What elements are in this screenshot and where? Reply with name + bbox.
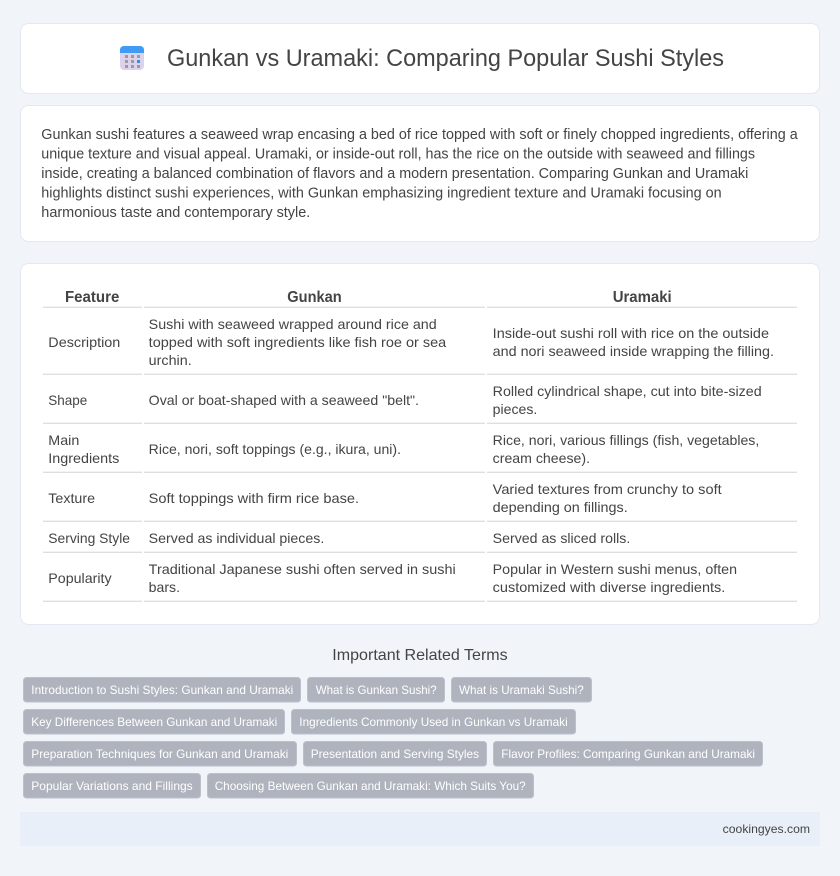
row: description: Inside-out sushi roll with rice on the outside: [493, 325, 769, 341]
row: description: Sushi with seaweed wrapped around rice and: [149, 316, 437, 332]
tag: What is Uramaki Sushi?: [459, 683, 584, 697]
footer: cookingyes.com: [723, 822, 810, 836]
tag: Presentation and Serving Styles: [311, 747, 479, 761]
row: shape: Rolled cylindrical shape, cut into bite-sized: [493, 383, 762, 399]
intro text block: [41, 127, 798, 221]
row: main ingredients: Rice, nori, various fillings (fish, vegetables,: [493, 432, 759, 448]
row: popularity: Popular in Western sushi menus, often: [493, 561, 737, 577]
tag: Ingredients Commonly Used in Gunkan vs Uramaki: [299, 715, 568, 729]
row: description: urchin.: [149, 352, 192, 368]
tag: [304, 742, 486, 766]
row: shape: pieces.: [493, 401, 537, 417]
row: main ingredients: Rice, nori, soft toppings (e.g., ikura, uni).: [149, 441, 401, 457]
table header row: Feature: [65, 289, 119, 306]
related terms tags: [24, 678, 762, 798]
row: texture: Texture: [48, 490, 95, 506]
intro text block: Gunkan sushi features a seaweed wrap encasing a bed of rice topped with soft or finely chopped ingredients, offering a: [41, 127, 798, 143]
icon: calendar: [120, 46, 144, 70]
intro text block: unique texture and visual appeal. Uramaki, or inside-out roll, has the rice on the outside with seaweed and fillings: [41, 146, 755, 162]
tag: Popular Variations and Fillings: [31, 779, 193, 793]
tag: [24, 678, 300, 702]
row: main ingredients: [48, 432, 759, 466]
row: description: and nori seaweed inside wrapping the filling.: [493, 343, 774, 359]
table header row: Gunkan: [287, 289, 342, 306]
row: popularity: Traditional Japanese sushi often served in sushi: [149, 561, 456, 577]
row: serving style: [48, 530, 630, 546]
title: Gunkan vs Uramaki: Comparing Popular Sushi Styles: [167, 45, 724, 72]
row: popularity: Popularity: [48, 570, 112, 586]
row: serving style: Served as individual pieces.: [149, 530, 324, 546]
panel: comparison table: [20, 264, 820, 624]
row: shape: Oval or boat-shaped with a seaweed "belt".: [149, 392, 419, 408]
row: shape: [48, 383, 762, 417]
tag: Choosing Between Gunkan and Uramaki: Which Suits You?: [215, 779, 526, 793]
row: popularity: bars.: [149, 579, 180, 595]
tag: [494, 742, 762, 766]
heading: important related terms: Important Related Terms: [332, 647, 508, 664]
row: popularity: customized with diverse ingredients.: [493, 579, 725, 595]
table header row: Uramaki: [613, 289, 672, 306]
row: texture: Varied textures from crunchy to soft: [493, 481, 722, 497]
row: main ingredients: cream cheese).: [493, 450, 590, 466]
row: description: topped with soft ingredients like fish roe or sea: [149, 334, 446, 350]
tag: [24, 742, 296, 766]
tag: Preparation Techniques for Gunkan and Uramaki: [31, 747, 288, 761]
header panel: [20, 24, 820, 94]
row: serving style: Serving Style: [48, 530, 130, 546]
row: main ingredients: Ingredients: [48, 450, 119, 466]
tag: [24, 710, 284, 734]
table header row: [65, 289, 672, 306]
intro text block: highlights distinct sushi experiences, with Gunkan emphasizing ingredient texture and Uramaki focusing on: [41, 186, 722, 202]
tag: Introduction to Sushi Styles: Gunkan and Uramaki: [31, 683, 293, 697]
tag: [452, 678, 592, 702]
footer: [20, 812, 820, 846]
tag: [24, 774, 200, 798]
intro text block: harmonious taste and contemporary style.: [41, 205, 310, 221]
tag: [308, 678, 444, 702]
row: texture: Soft toppings with firm rice base.: [149, 490, 359, 506]
tag: [292, 710, 576, 734]
intro text block: inside, creating a balanced combination of flavors and a modern presentation. Comparing Gunkan and Uramaki: [41, 166, 748, 182]
row: texture: depending on fillings.: [493, 499, 628, 515]
row: main ingredients: Main: [48, 432, 79, 448]
row: description: [48, 316, 774, 368]
panel: intro paragraph: [20, 106, 820, 242]
row: texture: [48, 481, 722, 515]
tag: Key Differences Between Gunkan and Uramaki: [31, 715, 277, 729]
row: description: Description: [48, 334, 120, 350]
tag: Flavor Profiles: Comparing Gunkan and Uramaki: [501, 747, 755, 761]
tag: [208, 774, 534, 798]
row: popularity: [48, 561, 737, 595]
row: serving style: Served as sliced rolls.: [493, 530, 630, 546]
tag: What is Gunkan Sushi?: [316, 683, 437, 697]
row: shape: Shape: [48, 392, 88, 408]
